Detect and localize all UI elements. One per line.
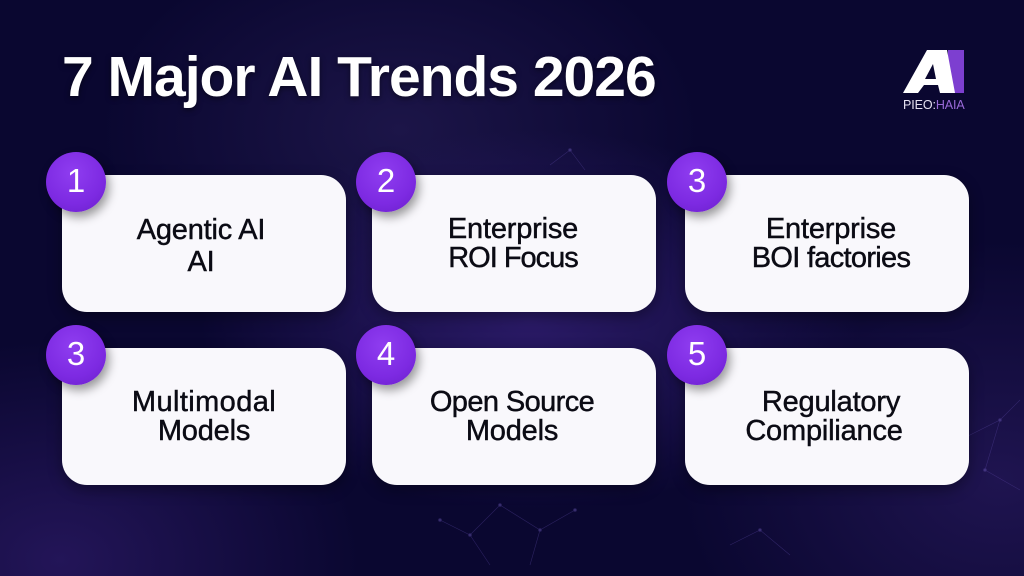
badge 5: 5 — [688, 335, 706, 372]
icon: logo letter I — [948, 50, 964, 93]
panel: card 5: Open Source — [430, 386, 594, 418]
panel: card 5 — [372, 348, 656, 485]
icon: logo letter A — [903, 50, 955, 93]
panel: card 3 — [685, 175, 969, 312]
panel: card 2 — [372, 175, 656, 312]
panel: card 6 — [685, 348, 969, 485]
panel: card 4 — [62, 348, 346, 485]
title: 7 Major AI Trends 2026 — [62, 45, 656, 109]
panel: card 1: AI — [188, 246, 214, 278]
logo — [903, 50, 965, 112]
badge 5 — [667, 325, 727, 385]
panel: card 6: Compiliance — [745, 415, 903, 447]
panel: card 5: Models — [466, 415, 558, 447]
badge 4 — [356, 325, 416, 385]
badge 1 — [46, 152, 106, 212]
panel: card 1: Agentic AI — [137, 214, 265, 246]
panel: card 3: Enterprise — [766, 213, 896, 245]
panel: card 1 — [62, 175, 346, 312]
badge 3 second row — [46, 325, 106, 385]
panel: card 3: BOI factories — [752, 242, 910, 274]
panel: card 4: Models — [158, 415, 250, 447]
badge 3 — [667, 152, 727, 212]
panel: card 2: ROI Focus — [448, 242, 578, 274]
panel: card 6: Regulatory — [762, 386, 900, 418]
badge 2: 2 — [377, 162, 395, 199]
badge 3 second row: 3 — [67, 335, 85, 372]
panel: card 2: Enterprise — [448, 213, 578, 245]
badge 4: 4 — [377, 335, 395, 372]
badge 2 — [356, 152, 416, 212]
panel: card 4: Multimodal — [132, 386, 276, 418]
badge 1: 1 — [67, 162, 85, 199]
badge 3: 3 — [688, 162, 706, 199]
logo caption: PIEO:HAIA — [903, 98, 965, 112]
